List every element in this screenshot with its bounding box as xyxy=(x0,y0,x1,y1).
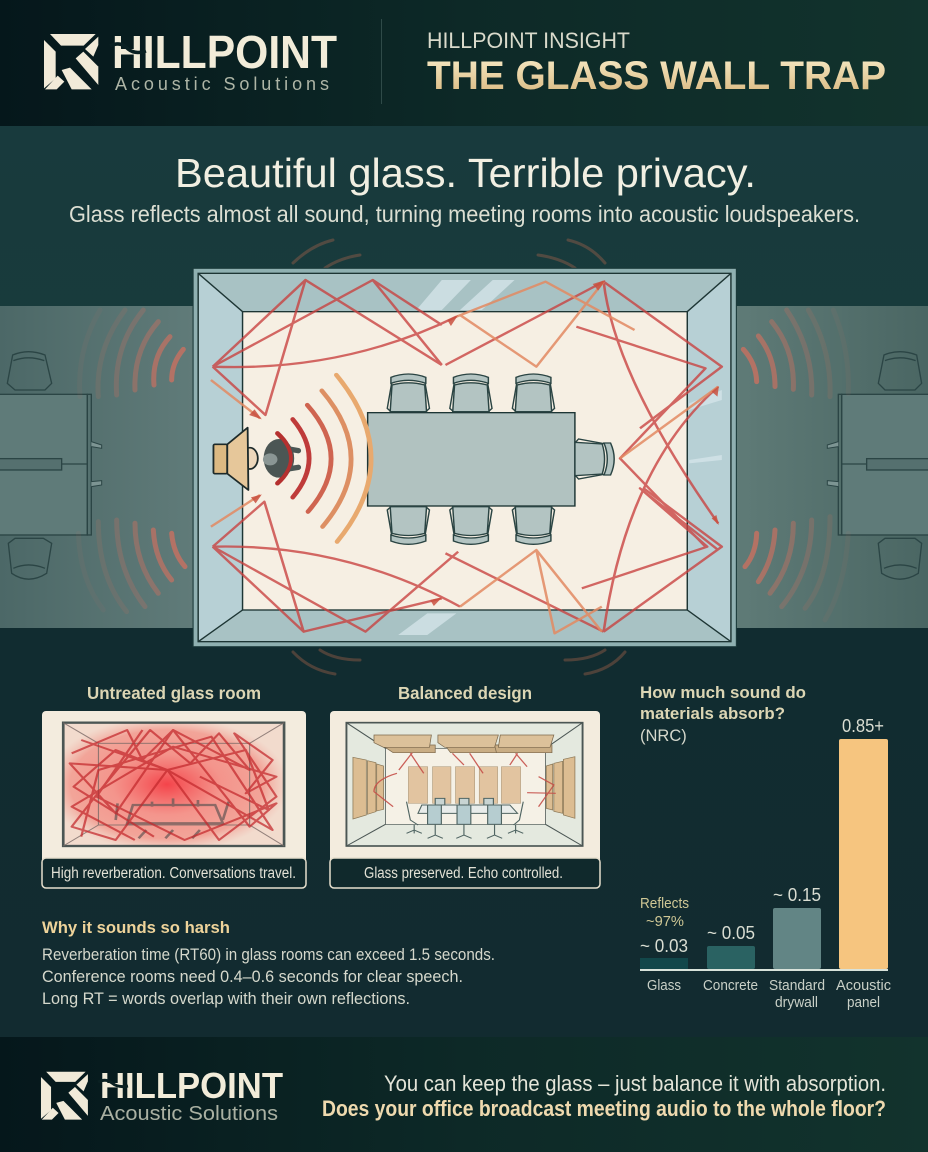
untreated caption xyxy=(42,858,306,888)
logo wave xyxy=(110,44,146,52)
header kicker: HILLPOINT INSIGHT xyxy=(427,28,630,53)
chairs xyxy=(387,374,614,544)
person xyxy=(263,433,298,483)
bar: glass xyxy=(640,958,688,969)
chair head of table xyxy=(575,439,614,479)
right desk xyxy=(827,352,928,579)
chair bottom 1 xyxy=(387,507,429,544)
glass reflects note xyxy=(640,895,689,930)
right chair top xyxy=(878,352,922,390)
chart axis xyxy=(640,969,888,971)
ghost table xyxy=(116,798,229,838)
glass highlights xyxy=(398,280,722,635)
chair top 2 xyxy=(450,374,492,412)
header divider xyxy=(381,19,382,104)
ceiling clouds xyxy=(374,735,554,753)
header logo xyxy=(44,26,337,94)
footer message: You can keep the glass – just balance it with absorption. xyxy=(384,1071,886,1096)
left office band xyxy=(0,306,194,628)
footer bar xyxy=(0,1037,928,1152)
chart title: (NRC) xyxy=(640,727,687,745)
chart title: How much sound do xyxy=(640,684,806,702)
why line 2: Conference rooms need 0.4–0.6 seconds for clear speech. xyxy=(42,967,463,986)
chart title xyxy=(640,684,806,745)
header bar xyxy=(0,0,928,126)
value labels: ~ 0.15 xyxy=(773,885,821,905)
room floor xyxy=(243,312,687,610)
side wall panels xyxy=(353,757,575,819)
left sound waves xyxy=(78,310,185,612)
category labels: Glass xyxy=(647,977,681,994)
balanced heading: Balanced design xyxy=(398,683,532,703)
reflected sound rays: red xyxy=(213,280,722,632)
glass reflects note: ~97% xyxy=(646,913,684,930)
right office band xyxy=(735,306,928,628)
footer logo xyxy=(41,1065,283,1125)
glass wall top xyxy=(198,273,731,312)
why heading: Why it sounds so harsh xyxy=(42,918,230,937)
right chair bottom xyxy=(878,538,922,579)
red reflections xyxy=(70,730,276,840)
untreated illustration xyxy=(63,723,284,846)
panel: balanced design xyxy=(330,683,600,888)
glass wall bottom xyxy=(198,610,731,642)
panel: untreated glass room: High reverberation. Conversations travel. xyxy=(51,865,296,882)
reflected sound rays: orange xyxy=(211,282,718,633)
bar: acoustic panel xyxy=(839,739,888,969)
left chair top xyxy=(7,352,52,390)
balanced caption xyxy=(330,858,600,888)
value labels: ~ 0.05 xyxy=(707,923,755,943)
why line 1: Reverberation time (RT60) in glass rooms can exceed 1.5 seconds. xyxy=(42,945,495,964)
untreated card xyxy=(42,711,306,888)
balanced illustration xyxy=(346,723,583,846)
right sound waves xyxy=(743,310,848,620)
bar: concrete xyxy=(707,946,755,969)
glass wall right xyxy=(687,273,731,642)
conference table xyxy=(368,413,575,506)
logo wordmark: HILLPOINT xyxy=(112,26,337,78)
chair top 3 xyxy=(512,374,555,412)
ray arrowheads xyxy=(249,280,719,606)
subheadline: Glass reflects almost all sound, turning meeting rooms into acoustic loudspeakers. xyxy=(69,201,860,227)
glass reflects note: Reflects xyxy=(640,895,689,912)
panel: untreated glass room xyxy=(42,683,306,888)
headline: Beautiful glass. Terrible privacy. xyxy=(175,150,756,196)
logo tagline: Acoustic Solutions xyxy=(115,74,329,94)
left chair bottom xyxy=(8,538,52,579)
main background xyxy=(0,126,928,1037)
logo mark xyxy=(44,34,98,89)
header title: THE GLASS WALL TRAP xyxy=(427,54,886,98)
why line 3: Long RT = words overlap with their own reflections. xyxy=(42,989,410,1008)
controlled sound arrows xyxy=(374,753,556,807)
category labels: panel xyxy=(847,994,880,1011)
category labels: Acoustic xyxy=(836,977,891,994)
footer wordmark: HILLPOINT xyxy=(100,1065,283,1106)
faint waves above and below the room xyxy=(293,240,625,674)
value labels: ~ 0.03 xyxy=(640,936,688,956)
category labels xyxy=(647,977,891,1011)
table and chairs xyxy=(407,798,523,838)
bar: standard drywall xyxy=(773,908,821,969)
value labels: 0.85+ xyxy=(842,716,884,736)
value labels xyxy=(640,716,884,956)
category labels: Standard xyxy=(769,977,825,994)
category labels: drywall xyxy=(775,994,818,1011)
footer logo mark xyxy=(41,1072,88,1120)
panel: balanced design: Glass preserved. Echo controlled. xyxy=(364,865,563,882)
chair bottom 2 xyxy=(450,507,492,544)
direct sound waves xyxy=(277,375,371,542)
left desk xyxy=(0,352,102,579)
text block: why it sounds so harsh xyxy=(42,918,495,1008)
footer tagline: Acoustic Solutions xyxy=(100,1103,278,1125)
glass frame xyxy=(193,268,736,647)
speaker icon xyxy=(213,428,258,490)
balanced card xyxy=(330,711,600,888)
bar chart: material absorption xyxy=(640,684,891,1011)
category labels: Concrete xyxy=(703,977,758,994)
footer wave xyxy=(98,1080,128,1087)
chart title: materials absorb? xyxy=(640,705,785,723)
glass wall left xyxy=(198,273,243,642)
main room plan xyxy=(193,268,736,647)
chair bottom 3 xyxy=(512,507,555,544)
untreated heading: Untreated glass room xyxy=(87,683,261,703)
back wall panels xyxy=(408,767,521,803)
chair top 1 xyxy=(387,374,429,412)
